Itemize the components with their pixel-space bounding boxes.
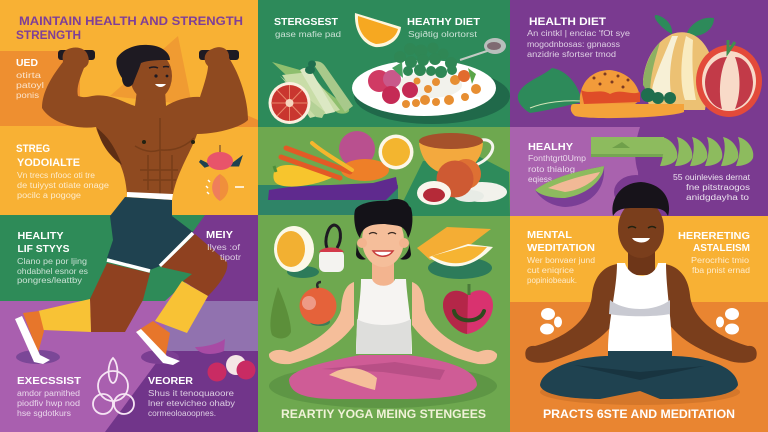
icon: green herbs [641,88,676,104]
text block: HERERETING ASTALEISM: Perocrhic tmio [691,256,750,265]
text block: VEORER: VEORER [148,375,193,387]
text block: VEORER [148,375,235,418]
icon: water bottle [319,225,344,272]
yoga mat [269,364,497,408]
heading: main title: STRENGTH [16,28,81,42]
text block: UED: UED [16,58,38,69]
text block: HEALITY LIF STYYS: Clano pe por ljing [17,257,87,266]
text block: UED [16,58,44,100]
right leg [161,234,227,296]
heading: meditation caption: PRACTS 6STE AND MEDITATION [543,409,735,421]
icon: lemon [378,134,414,170]
man2 hair [612,182,669,216]
plate [352,60,496,116]
text block: HEALHY: eqiess [528,175,552,184]
man2 tank top [608,263,672,351]
text block: HEALTH DIET: mogodnbosas: gpnaoss [527,40,620,49]
text block: STREG YODOIALTE: Vn trecs nfooc oti tre [17,171,96,180]
left sole [15,316,50,364]
icon: outlined nutrition symbol [93,358,134,414]
greens [394,42,457,78]
text block: STERGSEST: STERGSEST [274,16,339,28]
text block: HEALTH DIET: anzidrie sfortser tmod [527,50,616,59]
squash stem [274,166,276,172]
icon: baked bun [580,70,640,104]
text block: MENTAL WEDITATION: cut eniqrice [527,266,575,275]
text block: STREG YODOIALTE [16,143,110,200]
text block: HEALITY LIF STYYS: ohdabhel esnor es [17,267,88,276]
waistband [127,192,173,200]
cutting board with vegetables [268,131,398,200]
text block: MENTAL WEDITATION: MENTAL [527,229,573,241]
icon: right dumbbell [199,50,239,60]
right shoe [137,321,170,359]
icon: citrus wedges [417,227,493,279]
text block: nutrition note: fne pitstraogos [686,183,750,192]
woman head [362,213,404,267]
man head [130,51,172,101]
woman neck [372,262,394,286]
icon: cucumber slices [591,137,753,166]
left shoe [23,311,44,353]
text block: HERERETING ASTALEISM: HERERETING [678,230,750,242]
woman hair [354,201,412,238]
heading: yoga caption: REARTIY YOGA MEING STENGEES [281,409,486,421]
man2 head [618,200,664,258]
illustration: muscular man with dumbbells lunging [15,45,248,365]
text block: HEALTH DIET [527,16,631,59]
text block: HEALTH DIET: HEALTH DIET [529,16,606,28]
text block: MEIY: MEIY [206,230,233,241]
icon: left dumbbell [58,50,95,60]
text block: EXECSSIST: hse sgdotkurs [17,409,71,418]
text block: HERERETING ASTALEISM: ASTALEISM [693,242,750,254]
pink berries [368,70,418,104]
text block: MEIY: tipotr [220,253,241,262]
man torso and arms [42,47,248,194]
text block: STREG YODOIALTE: de tuiyyst otiate onage [17,181,110,190]
icon: leeks [272,60,353,118]
spoon [460,50,490,60]
man2 face [628,226,656,228]
text block: UED: otirta [16,71,42,80]
right sole [136,329,180,365]
icon: kale leaf [518,68,582,113]
text block: MENTAL WEDITATION: popiniobeauk. [527,276,577,285]
text block: EXECSSIST [17,375,82,418]
text block: HERERETING ASTALEISM [678,230,750,275]
heading: main title: MAINTAIN HEALTH AND STRENGTH [19,14,243,28]
text block: HEALITY LIF STYYS: HEALITY [18,230,64,242]
rice [398,72,462,98]
text block: EXECSSIST: EXECSSIST [17,375,82,387]
text block: STERGSEST: gase mafie pad [275,30,341,39]
icon: orange tray [571,104,684,118]
woman tank top [356,279,412,354]
text block: HEALHY: Fonthtgrt0Ump [528,154,587,163]
text block: HEALHY [528,141,587,184]
text block: HEALHY: roto thialog [528,165,575,174]
text block: HEALTH DIET: An cintkl | enciac 'fOt sye [527,29,631,38]
left leg [90,263,150,332]
text block: HEALITY LIF STYYS [17,230,88,285]
man2 leg shadow [540,379,740,405]
icon: melon bowl [535,166,604,207]
man2 legs [540,351,738,399]
text block: HERERETING ASTALEISM: fba pnist ernad [692,266,750,275]
icon: blood orange slice [268,82,310,124]
text block: MENTAL WEDITATION: Wer bonvaer jund [527,256,595,265]
carrots [281,148,350,178]
text block: MENTAL WEDITATION [527,229,595,285]
illustration: woman meditating in yoga pose [269,199,497,408]
illustration: man meditating [525,182,757,405]
text block: STREG YODOIALTE: pocilc a pogoge [17,191,82,200]
man lat shadow [97,128,122,165]
shorts [107,197,193,270]
icon: heart-shaped apple [443,284,493,334]
heading: main title [16,14,243,42]
text block: STREG YODOIALTE: YODOIALTE [17,157,80,169]
icon: green leaf [270,287,291,338]
icon: orange wedge [355,13,401,47]
icon: cut tomato [696,40,762,117]
woman leggings [289,355,477,399]
icon: fruit stack [200,145,244,201]
text block: EXECSSIST: amdor pamithed [17,389,80,398]
text block: nutrition note: 55 ouinlevies dernat [673,173,751,182]
shoe shadow right [141,350,179,364]
icon: berries [208,355,256,382]
shorts hems [107,233,193,271]
text block: VEORER: Shus it tenoquaoore [148,389,235,398]
man hair [116,45,170,87]
plate shadow [354,68,510,124]
icon: orange apple [300,282,336,326]
icon: right pebbles [716,308,739,334]
text block: UED: patoyl [16,81,44,90]
icon: left pebbles [540,308,562,334]
text block: HEATHY DIET: Sgiðtig olortorst [408,30,478,39]
carrots and garnish [402,75,481,108]
purple apple [339,131,375,167]
orange squash [341,159,389,181]
man2 neck [628,250,655,275]
man2 arms [525,264,757,363]
left sock [38,299,91,332]
text block: MENTAL WEDITATION: WEDITATION [527,242,595,254]
text block: MEIY: Ilyes :of [207,243,241,252]
text block: MEIY [206,230,241,262]
text block: STERGSEST [274,16,341,39]
icon: purple bowl [195,339,225,354]
text block: UED: ponis [16,91,39,100]
text block: VEORER: cormeoloaoopnes. [148,409,216,418]
icon: big melon [643,15,714,110]
text block: HEALHY: HEALHY [528,141,573,153]
text block: STREG YODOIALTE: STREG [16,143,50,155]
icon: half orange [274,226,319,278]
text block: HEATHY DIET [407,16,481,39]
icon: apples and cream [436,159,507,202]
right sock [155,281,208,333]
text block: HEALITY LIF STYYS: LIF STYYS [18,243,70,255]
woman foot [329,368,377,390]
text block: VEORER: lner etevicheo ohaby [148,399,235,408]
icon: soup cup [419,133,493,174]
shoe shadow left [16,350,60,364]
woman face [369,232,396,234]
board [268,177,398,200]
yellow squash [273,165,333,187]
woman arms [269,282,497,364]
plate with food [352,38,510,124]
man muscle lines [135,118,194,194]
icon: jam dish [417,181,451,205]
text block: EXECSSIST: piodfiv hwp nod [17,399,80,408]
text block: HEALITY LIF STYYS: pongres/leattby [17,276,82,285]
text block: nutrition note [673,173,751,202]
text block: HEATHY DIET: HEATHY DIET [407,16,481,28]
text block: nutrition note: anidgdayha to [686,193,750,202]
